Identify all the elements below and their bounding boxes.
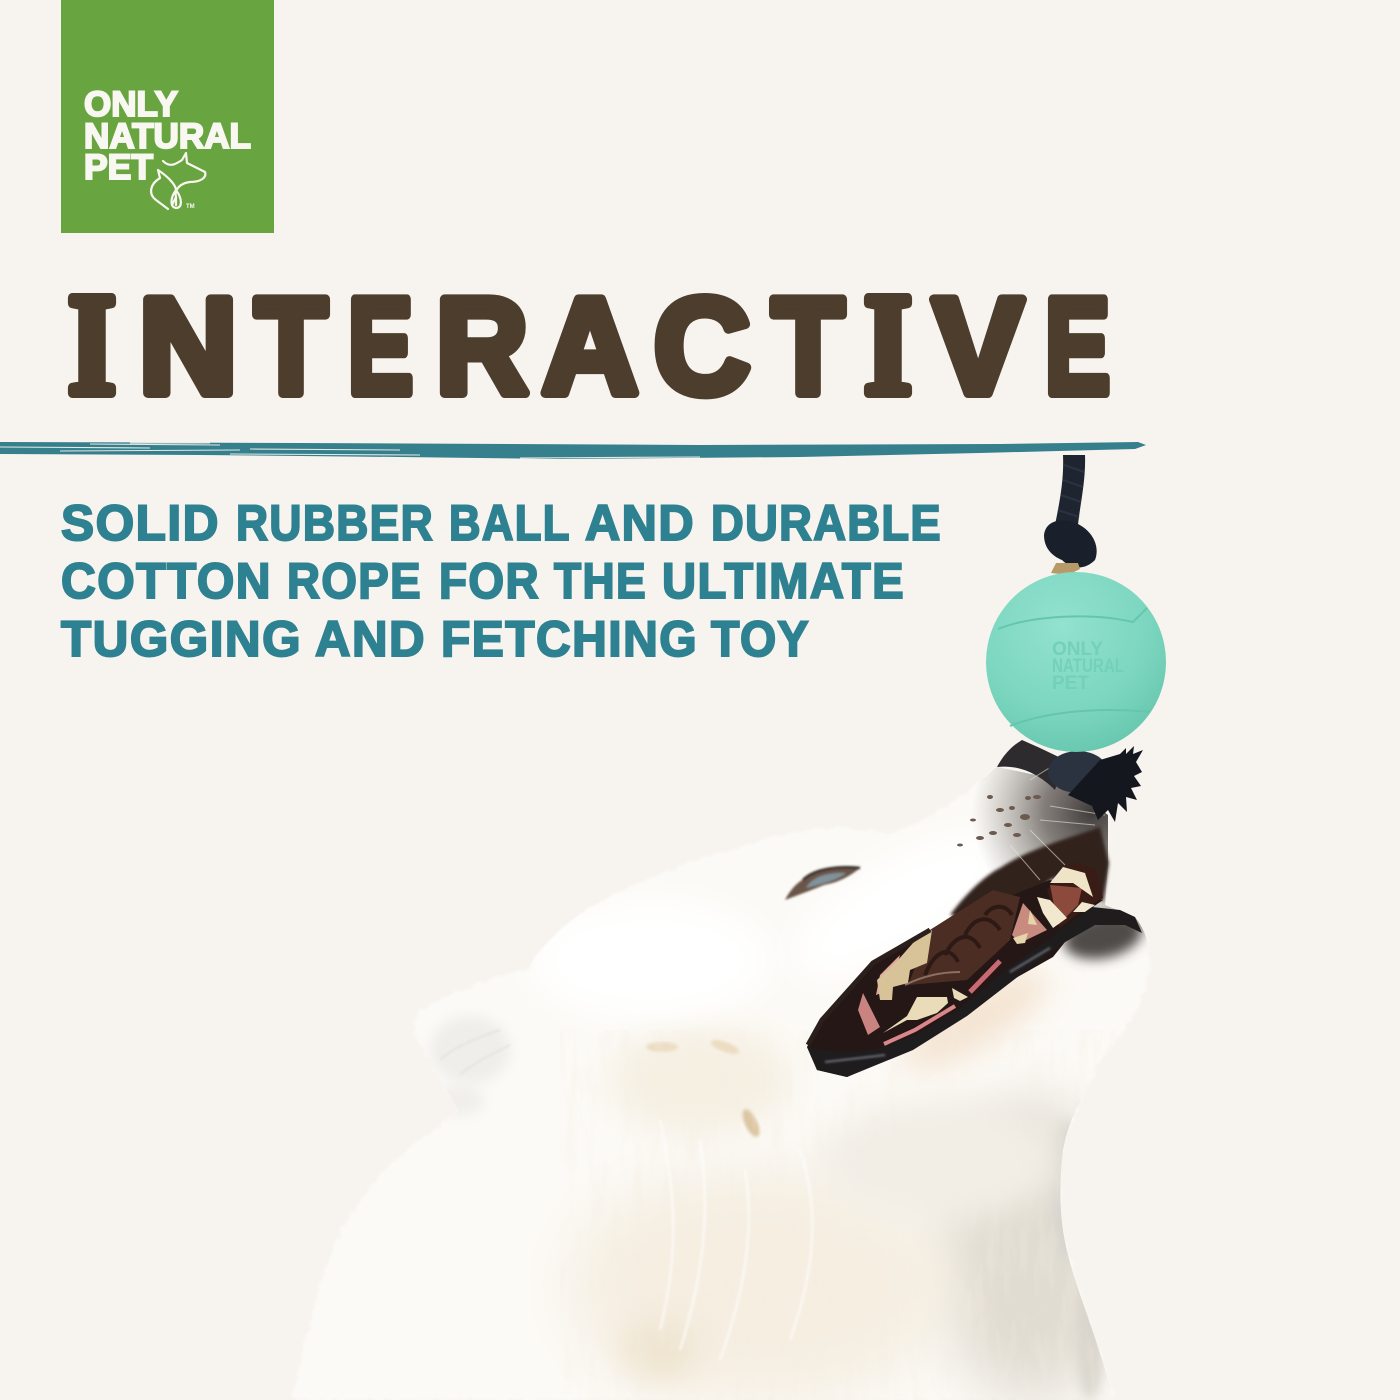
title: T [255,270,327,422]
teeth [877,867,1095,1033]
ball embossed logo: ONLY [1052,639,1103,660]
title: R [436,270,528,422]
lower lip [807,907,1142,1077]
ear crease [440,1030,510,1075]
subheading text: AND [585,495,695,551]
subheading text: SOLID [61,495,220,551]
title: I [68,265,116,425]
logo wordmark: NATURAL [84,117,251,156]
subheading text: THE [554,553,647,609]
subheading text: ULTIMATE [662,553,905,609]
whisker spots [957,795,1041,846]
gums [858,903,1047,1044]
upper muzzle dark fur [950,827,1109,918]
logo icon: dog and cat outline [151,153,205,209]
subheading text: DURABLE [711,495,942,551]
logo wordmark: ONLY [84,85,178,124]
dog body [292,767,1150,1400]
title: N [139,270,237,422]
subheading text: FOR [439,553,540,609]
mouth [807,827,1142,1077]
rubber ball [986,572,1166,752]
rope fibres at ball [1051,563,1080,575]
lower jaw dark fade [1059,906,1147,966]
title: E [1045,270,1110,422]
title: A [542,270,638,422]
rope strand [1055,455,1085,525]
subheading text: TOY [711,611,810,667]
title: I [864,265,912,425]
fur shading [433,767,1148,1400]
muzzle dark fade [978,767,1116,910]
rope knot [1044,520,1097,568]
subheading text: COTTON [61,553,272,609]
logo trademark: TM [186,204,195,210]
tongue palate ridges [905,890,1020,985]
eye [785,867,860,900]
subheading text: AND [315,611,426,667]
fur texture [752,1117,756,1128]
rope tassel [1048,746,1143,822]
logo wordmark [84,85,251,187]
title: E [348,270,413,422]
title: V [933,270,1023,422]
brush stroke divider [0,442,1146,459]
subheading text [61,495,942,667]
subheading text: FETCHING [441,611,698,667]
title: C [654,270,750,422]
subheading text: TUGGING [61,611,302,667]
nose [997,740,1065,790]
subheading text: BALL [449,495,570,551]
rope [1044,455,1143,822]
title: T [772,270,844,422]
ball embossed logo: NATURAL [1052,656,1124,677]
whiskers [1010,755,1105,880]
logo badge [61,0,274,233]
ball seams [998,608,1147,629]
upper lip edge [808,930,930,1045]
fur strands [660,1120,812,1360]
mouth dark interior [807,880,1103,1077]
throat [1047,862,1103,928]
subheading text: RUBBER [236,495,434,551]
dog [439,740,1147,1400]
logo wordmark: PET [84,148,153,187]
subheading text: ROPE [287,553,422,609]
ball embossed logo: PET [1052,673,1089,694]
ball embossed logo [1052,639,1124,694]
